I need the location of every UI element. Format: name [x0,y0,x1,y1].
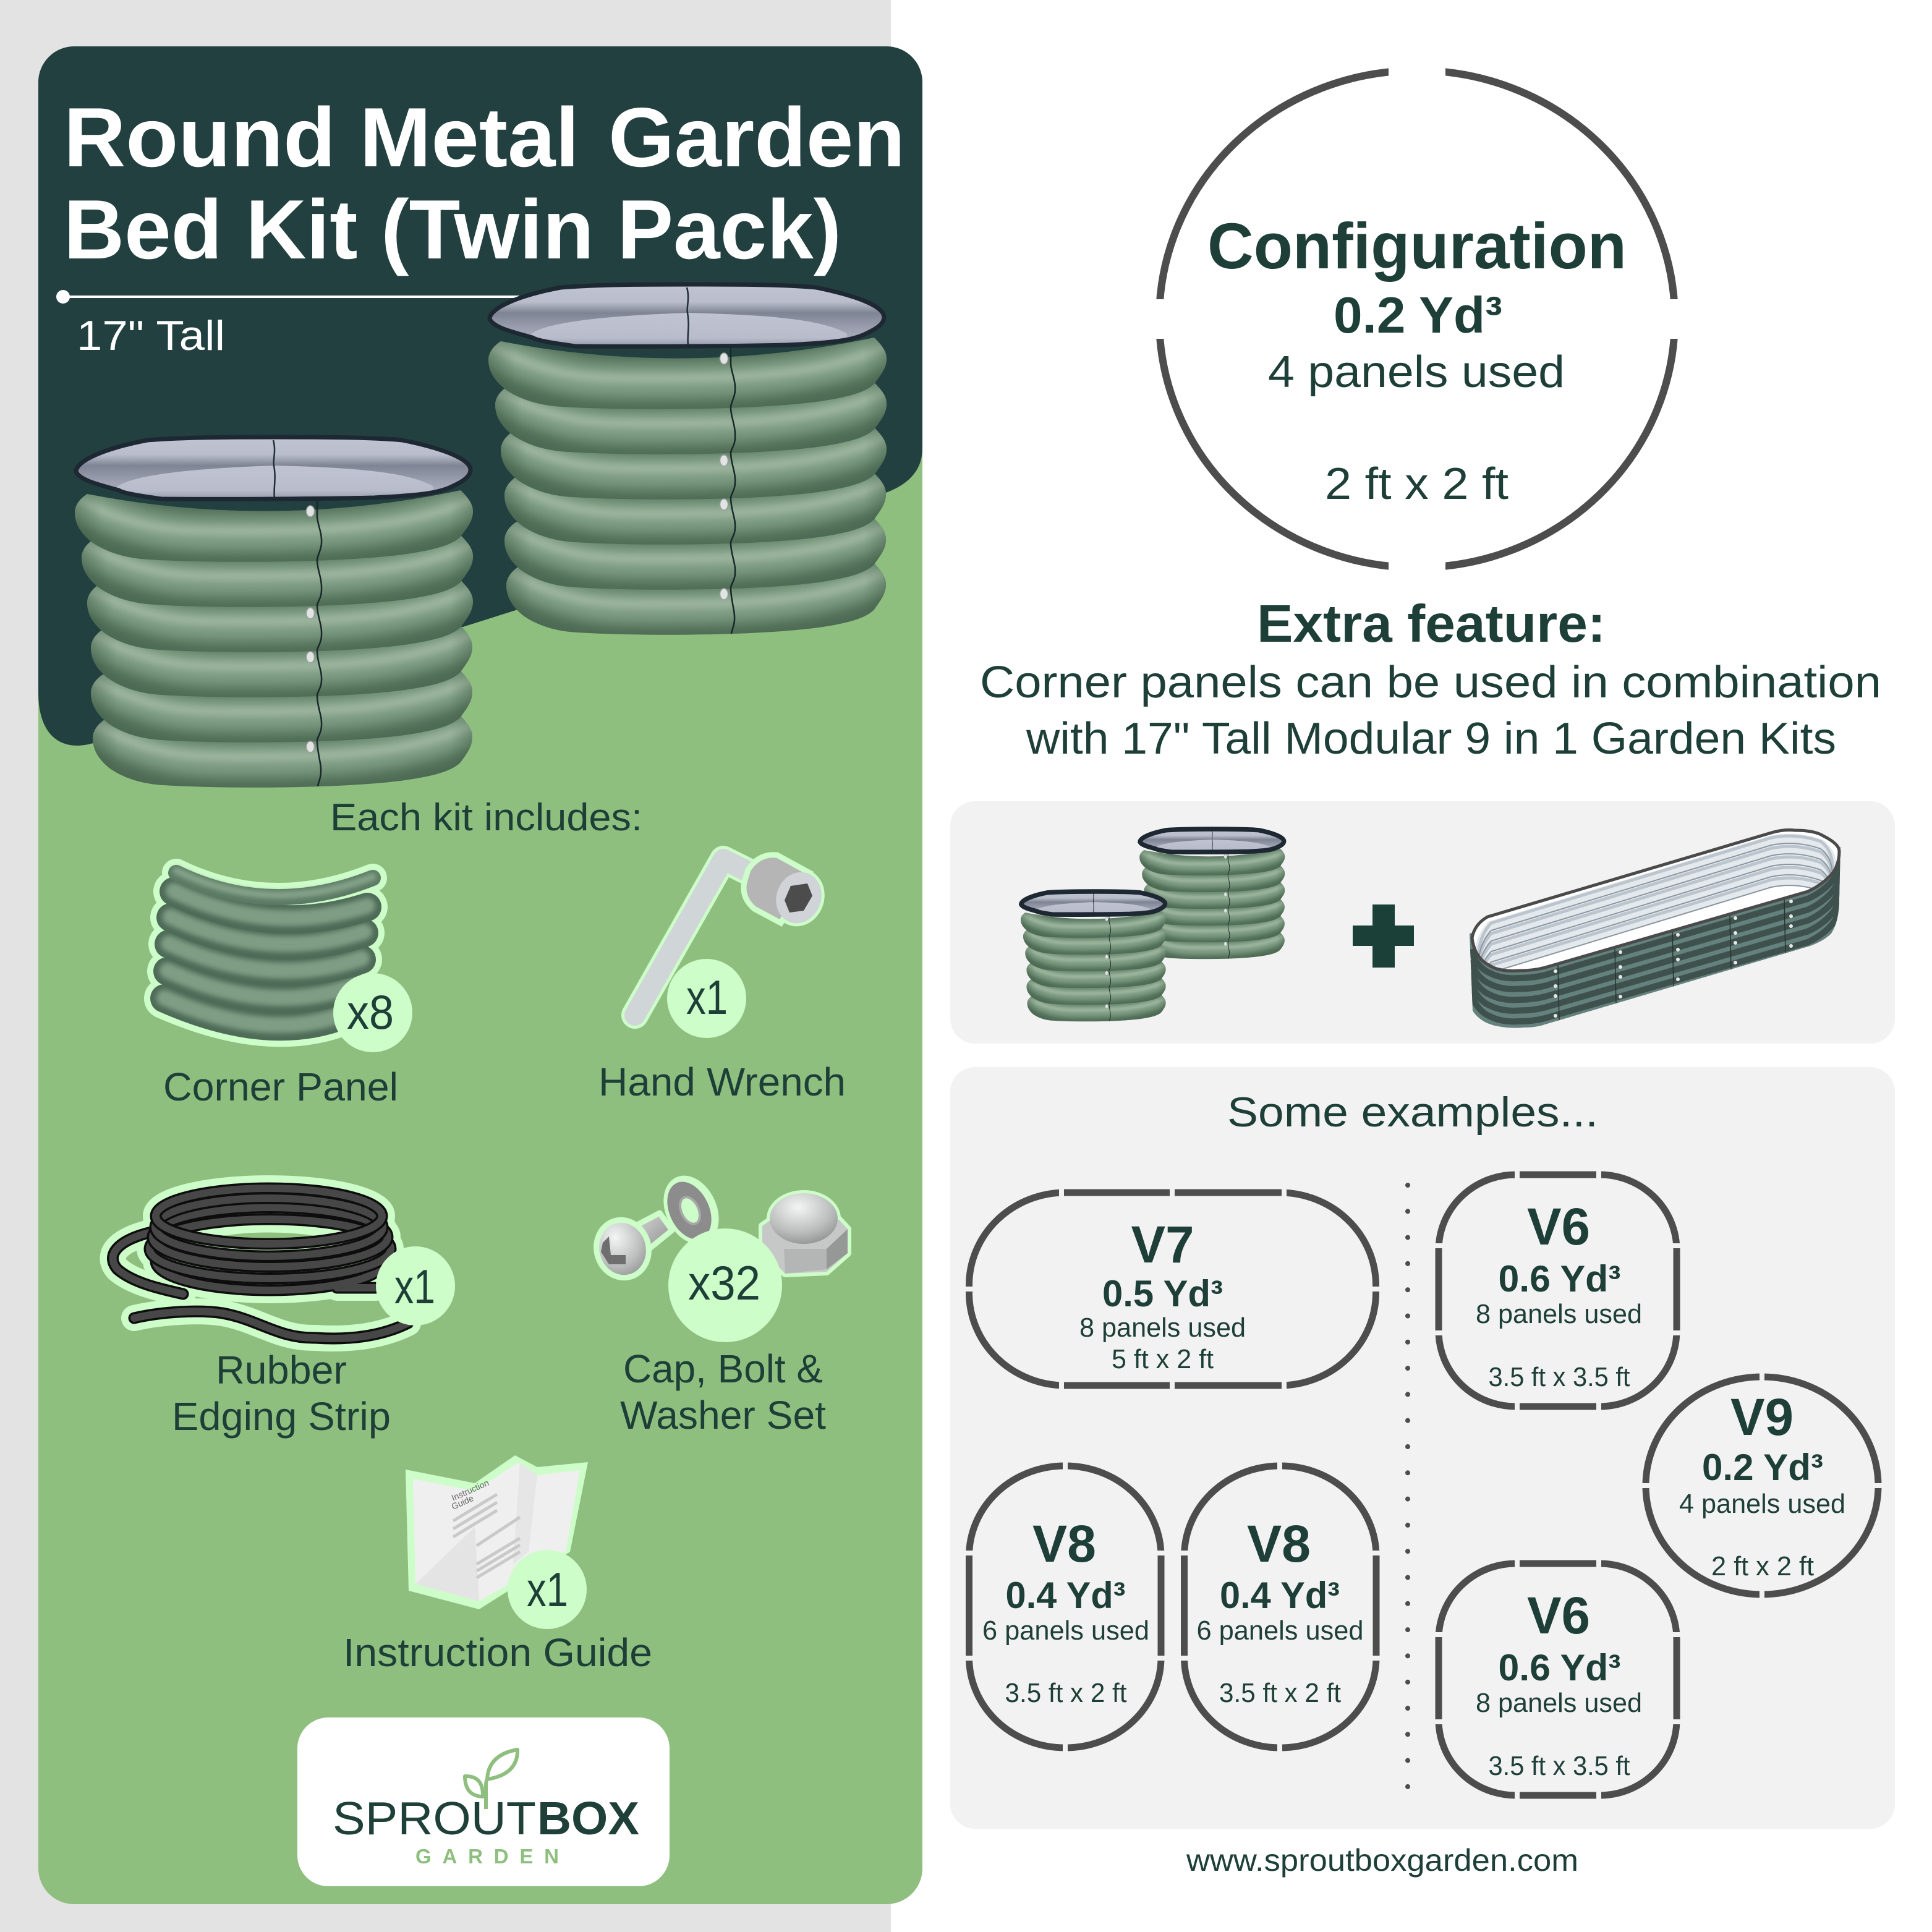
bed interior [1472,830,1839,971]
badge: x32 [668,1228,782,1342]
configuration text: 4 panels used [1268,347,1565,397]
title: Bed Kit (Twin Pack) [64,182,841,276]
icon: bolt [590,1213,672,1283]
icon: sprout [465,1750,517,1809]
panel: some examples [950,1067,1895,1829]
wordmark: GARDEN [415,1845,559,1868]
dark header shape [38,46,922,746]
heading: each kit includes: Each kit includes: [330,796,642,839]
item: rubber edging strip [113,1188,455,1439]
extra feature text: Extra feature: [1257,595,1606,653]
example: V7: 0.5 Yd³ [1102,1273,1223,1314]
configuration text: 0.2 Yd³ [1334,286,1502,344]
example: V8 right [1177,1459,1383,1755]
icon: folded guide: Instruction [450,1478,490,1503]
title rule [56,290,519,304]
badge: x1 [508,1550,587,1629]
example: V8 right: V8 [1247,1515,1311,1573]
example: V9: 4 panels used [1679,1489,1845,1519]
website: www.sproutboxgarden.com [1186,1843,1578,1878]
icon: wrench [635,855,833,1015]
bed wall [1470,847,1841,1028]
garden bed: back [482,284,896,646]
small bed: front [1018,892,1170,1026]
example: V8 right: 6 panels used [1197,1615,1364,1646]
example: V9: V9 [1730,1388,1794,1446]
example: V6 bottom: 0.6 Yd³ [1499,1647,1621,1688]
example: V6 bottom: V6 [1527,1586,1590,1645]
example: V7 [962,1186,1383,1392]
configuration text: 2 ft x 2 ft [1325,459,1509,509]
label: cap, bolt and washer set: Washer Set [620,1393,826,1437]
label: rubber edging strip: Rubber [216,1348,347,1392]
icon: corner panel [164,870,373,1026]
configuration text: Configuration [1207,210,1627,283]
example: V9: 0.2 Yd³ [1702,1447,1823,1488]
item: cap, bolt and washer set [590,1172,848,1437]
example: V8 left: V8 [1032,1515,1096,1573]
example: V8 left: 3.5 ft x 2 ft [1005,1678,1126,1708]
item: instruction guide [343,1455,652,1675]
example: V9 [1639,1370,1885,1601]
icon: cap nut [762,1190,848,1274]
configuration text [1207,210,1627,509]
label: rubber edging strip: Edging Strip [172,1394,391,1439]
label: corner panel: Corner Panel [163,1065,398,1109]
label: rubber edging strip [172,1348,391,1439]
label: cap, bolt and washer set: Cap, Bolt & [623,1347,823,1391]
long modular bed [1465,828,1845,1032]
example: V6 bottom: 8 panels used [1476,1688,1642,1718]
example: V7: 5 ft x 2 ft [1112,1344,1214,1374]
badge: x8: x8 [347,985,394,1039]
example: V7: V7 [1131,1215,1194,1274]
extra feature text: with 17" Tall Modular 9 in 1 Garden Kits [1026,714,1836,764]
example: V6 top: 0.6 Yd³ [1499,1258,1621,1300]
icon: folded guide: Guide [450,1493,475,1512]
example: V6 top: 8 panels used [1476,1299,1642,1329]
heading: some examples: Some examples... [1227,1089,1598,1136]
example: V6 top: V6 [1527,1198,1590,1256]
badge: x1: x1 [527,1562,568,1617]
logo card [297,1717,670,1886]
icon: plus [1353,904,1414,968]
title: Garden [608,90,905,184]
example: V6 top [1432,1168,1683,1413]
title: Round Metal [64,90,579,184]
extra feature text [980,595,1881,764]
example: V8 left: 0.4 Yd³ [1005,1575,1125,1616]
item: corner panel [163,870,412,1109]
garden bed: front [69,437,483,799]
bed rim [1472,830,1839,971]
extra feature text: Corner panels can be used in combination [980,658,1881,707]
title [64,90,905,276]
small bed: back [1138,829,1288,963]
label: cap, bolt and washer set [620,1347,826,1437]
example: V8 right: 0.4 Yd³ [1220,1575,1340,1616]
badge: x1: x1 [686,970,728,1024]
badge: x1 [376,1246,455,1326]
example: V8 left: 6 panels used [982,1615,1149,1646]
wordmark: BOX [537,1792,639,1844]
badge: x8 [333,973,412,1052]
icon: folded guide [406,1455,588,1609]
left grey strip [0,0,891,1932]
example: V7: 8 panels used [1079,1313,1246,1343]
label: instruction guide: Instruction Guide [343,1630,652,1675]
label: hand wrench: Hand Wrench [598,1060,846,1104]
item: hand wrench [598,855,846,1104]
wordmark [333,1792,639,1868]
example: V8 right: 3.5 ft x 2 ft [1219,1678,1341,1708]
example: V6 top: 3.5 ft x 3.5 ft [1489,1362,1630,1392]
panel: combination [950,801,1895,1044]
badge: x1: x1 [394,1259,435,1314]
subtitle: height: 17" Tall [77,312,225,359]
badge: x32: x32 [688,1256,760,1310]
green panel background [38,46,922,1904]
badge: x1 [667,959,746,1038]
configuration ring [1150,62,1685,575]
example: V9: 2 ft x 2 ft [1711,1551,1814,1581]
icon: rubber coil [113,1188,408,1338]
example: V6 bottom: 3.5 ft x 3.5 ft [1489,1751,1630,1781]
dotted divider [1405,1185,1410,1788]
example: V6 bottom [1432,1557,1683,1802]
icon: washer [658,1172,725,1248]
wordmark: SPROUT [333,1792,536,1844]
bolts [1554,900,1793,1018]
example: V8 left [962,1459,1168,1755]
panel: kit contents [38,46,922,1904]
